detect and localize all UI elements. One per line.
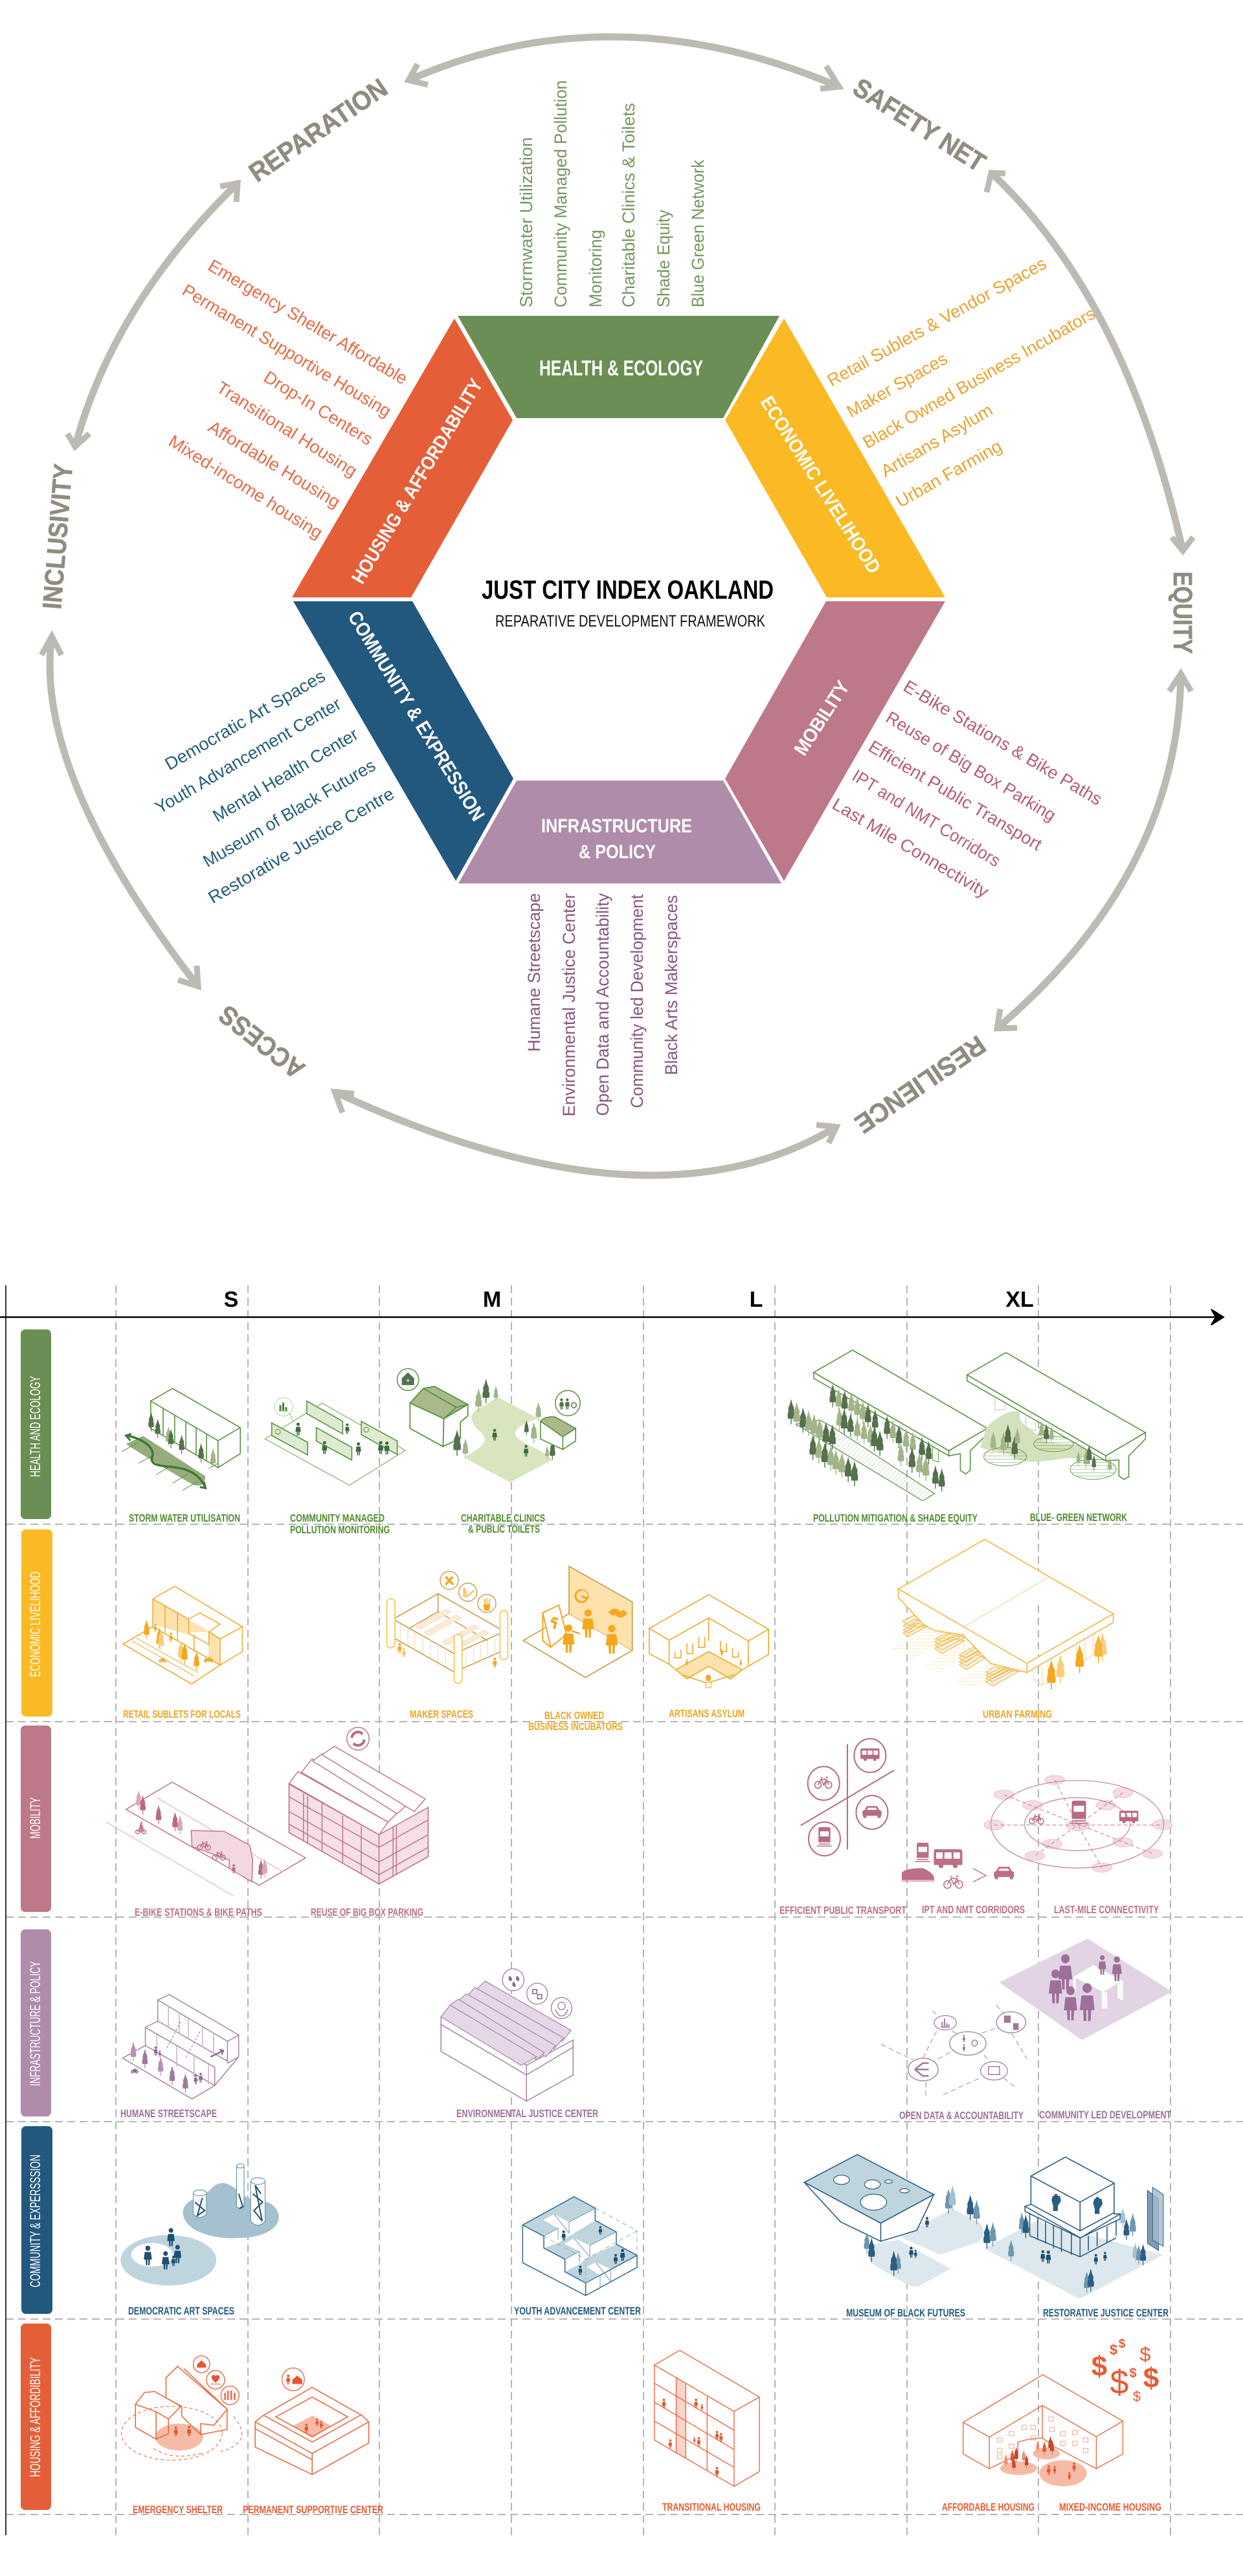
icon: floating dollar signs: $ (1092, 2351, 1107, 2382)
illustration: artisans asylum (649, 1595, 768, 1688)
row label: infrastructure and policy: INFRASTRUCTURE & POLICY (27, 1961, 43, 2086)
captions: housing and affordability: TRANSITIONAL HOUSING (662, 2501, 761, 2513)
illustration: permanent supportive center (255, 2368, 369, 2474)
captions: health and ecology (129, 1511, 1128, 1536)
illustration: transitional housing (655, 2350, 759, 2486)
captions: health and ecology: POLLUTION MONITORING (290, 1524, 390, 1536)
arrow: reparation to safety net (409, 37, 839, 89)
illustration: restorative justice center (983, 2157, 1163, 2299)
captions: infrastructure and policy: ENVIRONMENTAL JUSTICE CENTER (456, 2107, 598, 2120)
captions: economic livelihood: URBAN FARMING (983, 1708, 1052, 1720)
captions: community and expression: DEMOCRATIC ART SPACES (128, 2305, 234, 2317)
hexagon segment: housing and affordability: HOUSING & AFFORDABILITY (348, 375, 487, 588)
hexagon segment: health and ecology (458, 316, 779, 418)
list: community and expression: Youth Advancement Center (151, 694, 344, 817)
hexagon segment: mobility (725, 601, 945, 881)
captions: community and expression (128, 2305, 1169, 2319)
list: community and expression: Restorative Justice Centre (205, 784, 398, 907)
captions: economic livelihood: MAKER SPACES (410, 1708, 473, 1720)
list: mobility (829, 676, 1105, 902)
captions: community and expression: RESTORATIVE JUSTICE CENTER (1043, 2307, 1169, 2319)
list: health and ecology: Shade Equity (654, 210, 673, 307)
icon: floating dollar signs: $ (1110, 2342, 1117, 2358)
row label: mobility: MOBILITY (27, 1797, 43, 1839)
scale label: XL: XL (1005, 1287, 1034, 1312)
illustration: museum of black futures (804, 2155, 983, 2287)
row label: mobility (21, 1726, 51, 1912)
list: economic livelihood: Black Owned Business Incubators (860, 304, 1099, 452)
list: housing and affordability: Emergency Shelter Affordable (205, 256, 411, 388)
illustration: emergency shelter (122, 2356, 242, 2460)
scale label: M: M (483, 1287, 501, 1312)
hexagon segment: infrastructure and policy: INFRASTRUCTURE (541, 816, 692, 837)
captions: health and ecology: CHARITABLE CLINICS (461, 1512, 545, 1524)
captions: mobility: IPT AND NMT CORRIDORS (922, 1904, 1025, 1916)
list: infrastructure and policy: Community led Development (627, 894, 647, 1108)
list: economic livelihood: Urban Farming (893, 436, 1005, 511)
axis arrow (0, 1309, 1224, 1325)
label: resilience: RESILIENCE (849, 1030, 991, 1139)
arrow: access to inclusivity (41, 636, 198, 986)
hexagon segment: infrastructure and policy: & POLICY (579, 841, 656, 863)
icon: floating dollar signs: $ (1129, 2366, 1137, 2381)
label: inclusivity: INCLUSIVITY (37, 463, 78, 610)
captions: health and ecology: BLUE- GREEN NETWORK (1030, 1511, 1128, 1524)
captions: mobility (135, 1904, 1159, 1918)
scale label: L: L (750, 1287, 763, 1312)
list: housing and affordability: Affordable Housing (205, 417, 344, 512)
hexagon segment: community and expression: COMMUNITY & EXPRESSION (344, 608, 489, 825)
captions: infrastructure and policy: OPEN DATA & ACCOUNTABILITY (899, 2109, 1024, 2122)
captions: housing and affordability: AFFORDABLE HOUSING (942, 2501, 1035, 2513)
arrow: safety net to equity (987, 173, 1193, 551)
illustration: democratic art spaces (120, 2164, 279, 2285)
row label: housing and affordability: HOUSING & AFFORDIBILITY (27, 2357, 43, 2477)
captions: health and ecology: & PUBLIC TOILETS (468, 1523, 540, 1535)
list: community and expression: Democratic Art Spaces (161, 666, 329, 774)
list: health and ecology: Blue Green Network (688, 160, 708, 307)
list: housing and affordability: Transitional Housing (213, 377, 361, 481)
illustration: affordable and mixed-income housing (963, 2375, 1123, 2486)
illustration: ipt and nmt corridors (901, 1843, 1014, 1888)
hexagon segment: community and expression (293, 601, 513, 881)
illustration: pollution mitigation and shade equity (788, 1350, 987, 1501)
list: community and expression (151, 666, 398, 907)
list: community and expression: Museum of Black Futures (199, 755, 379, 871)
matrix grid (0, 1285, 1243, 2535)
label: reparation: REPARATION (243, 72, 393, 188)
list: health and ecology: Monitoring (586, 230, 605, 307)
captions: economic livelihood (123, 1707, 1052, 1733)
list: housing and affordability: Mixed-income housing (165, 431, 326, 542)
row label: community and expression (21, 2126, 52, 2314)
captions: infrastructure and policy: COMMUNITY LED DEVELOPMENT (1039, 2109, 1171, 2121)
icon: floating dollar signs (1092, 2337, 1159, 2404)
label: access: ACCESS (213, 999, 310, 1085)
list: infrastructure and policy (524, 893, 681, 1116)
list: mobility: E-Bike Stations & Bike Paths (900, 676, 1105, 809)
list: housing and affordability (165, 256, 411, 542)
illustration: maker spaces (386, 1571, 508, 1683)
hexagon segment: health and ecology: HEALTH & ECOLOGY (539, 356, 703, 380)
label: safety net: SAFETY NET (848, 72, 991, 177)
subtitle: REPARATIVE DEVELOPMENT FRAMEWORK (495, 612, 765, 630)
list: housing and affordability: Permanent Supportive Housing (179, 280, 394, 421)
captions: mobility: REUSE OF BIG BOX PARKING (311, 1906, 423, 1918)
list: housing and affordability: Drop-In Centers (260, 367, 376, 449)
list: mobility: Last Mile Connectivity (829, 794, 992, 902)
list: health and ecology: Stormwater Utilization (517, 137, 536, 307)
captions: mobility: E-BIKE STATIONS & BIKE PATHS (135, 1906, 262, 1918)
captions: infrastructure and policy (120, 2107, 1171, 2122)
icon: floating dollar signs: $ (1119, 2337, 1126, 2351)
captions: housing and affordability: PERMANENT SUPPORTIVE CENTER (243, 2504, 383, 2516)
illustration: environmental justice center (441, 1969, 573, 2101)
captions: economic livelihood: ARTISANS ASYLUM (669, 1707, 745, 1720)
arrow: resilience to access (335, 1092, 836, 1175)
illustration: last-mile connectivity (984, 1775, 1172, 1872)
list: health and ecology (517, 80, 708, 307)
scale label: S: S (224, 1287, 238, 1312)
list: health and ecology: Charitable Clinics & Toilets (619, 103, 638, 307)
hexagon segment: housing and affordability (292, 318, 513, 597)
captions: housing and affordability (133, 2501, 1161, 2516)
list: community and expression: Mental Health Center (209, 724, 362, 826)
captions: health and ecology: POLLUTION MITIGATION & SHADE EQUITY (813, 1512, 978, 1524)
hexagon segment: mobility: MOBILITY (790, 677, 854, 759)
illustration: efficient public transport (801, 1738, 894, 1856)
arrow: inclusivity to reparation (67, 183, 238, 447)
hexagon segment: infrastructure and policy (458, 781, 781, 883)
illustration: blue-green network (967, 1353, 1145, 1480)
list: mobility: Reuse of Big Box Parking (882, 707, 1059, 825)
icon: floating dollar signs: $ (1143, 2362, 1159, 2394)
captions: health and ecology: COMMUNITY MANAGED (290, 1512, 385, 1524)
list: mobility: Efficient Public Transport (865, 737, 1046, 854)
row label: community and expression: COMMUNITY & EXPERSSSION (27, 2155, 43, 2287)
illustration: storm water utilisation (122, 1388, 240, 1491)
row label: health and ecology: HEALTH AND ECOLOGY (27, 1376, 43, 1477)
captions: housing and affordability: MIXED-INCOME HOUSING (1059, 2501, 1161, 2513)
list: infrastructure and policy: Humane Streetscape (524, 893, 544, 1052)
captions: economic livelihood: RETAIL SUBLETS FOR LOCALS (123, 1708, 241, 1720)
illustration: charitable clinics and public toilets (398, 1369, 580, 1482)
list: mobility: IPT and NMT Corridors (849, 766, 1003, 871)
captions: mobility: EFFICIENT PUBLIC TRANSPORT (779, 1904, 906, 1916)
row label: infrastructure and policy (21, 1929, 51, 2116)
hexagon segment: economic livelihood: ECONOMIC LIVELIHOOD (756, 392, 884, 577)
illustration: community led development (999, 1938, 1172, 2040)
icon: floating dollar signs: $ (1139, 2343, 1151, 2366)
captions: health and ecology: STORM WATER UTILISATION (129, 1512, 240, 1524)
captions: community and expression: MUSEUM OF BLACK FUTURES (846, 2307, 965, 2319)
illustration: urban farming (891, 1539, 1114, 1689)
illustration: retail sublets (123, 1586, 242, 1684)
captions: community and expression: YOUTH ADVANCEMENT CENTER (514, 2305, 641, 2317)
row label: economic livelihood: ECONOMIC LIVELIHOOD (27, 1571, 43, 1677)
list: economic livelihood (824, 254, 1099, 511)
captions: infrastructure and policy: HUMANE STREETSCAPE (120, 2107, 217, 2120)
list: infrastructure and policy: Black Arts Makerspaces (662, 895, 681, 1075)
diagram: just city index ring (37, 37, 1198, 1175)
captions: economic livelihood: BUSINESS INCUBATORS (528, 1720, 623, 1733)
list: infrastructure and policy: Environmental Justice Center (559, 893, 579, 1116)
captions: housing and affordability: EMERGENCY SHELTER (133, 2504, 223, 2516)
arrow: equity to resilience (997, 674, 1191, 1028)
list: economic livelihood: Maker Spaces (844, 349, 951, 421)
list: infrastructure and policy: Open Data and Accountability (593, 893, 612, 1116)
row label: health and ecology (21, 1329, 51, 1519)
list: economic livelihood: Retail Sublets & Vendor Spaces (824, 254, 1049, 390)
row label: economic livelihood (21, 1529, 52, 1716)
illustration: community managed pollution monitoring (265, 1397, 405, 1485)
illustration: reuse of big box parking (289, 1727, 428, 1884)
captions: mobility: LAST-MILE CONNECTIVITY (1054, 1904, 1159, 1916)
illustration: youth advancement center (522, 2197, 637, 2296)
title: JUST CITY INDEX OAKLAND (482, 575, 774, 605)
label: equity: EQUITY (1168, 572, 1198, 654)
list: health and ecology: Community Managed Pollution (551, 80, 570, 307)
illustration: e-bike stations and bike paths (106, 1782, 306, 1896)
illustration: black owned business incubators (523, 1566, 633, 1678)
row label: housing and affordability (21, 2324, 51, 2510)
captions: economic livelihood: BLACK OWNED (544, 1709, 604, 1722)
illustration: open data and accountability (881, 2005, 1027, 2099)
illustration: humane streetscape (122, 1995, 239, 2099)
icon: floating dollar signs: $ (1133, 2388, 1141, 2404)
list: economic livelihood: Artisans Asylum (877, 400, 996, 481)
icon: floating dollar signs: $ (1110, 2364, 1129, 2401)
hexagon segment: economic livelihood (725, 318, 945, 597)
